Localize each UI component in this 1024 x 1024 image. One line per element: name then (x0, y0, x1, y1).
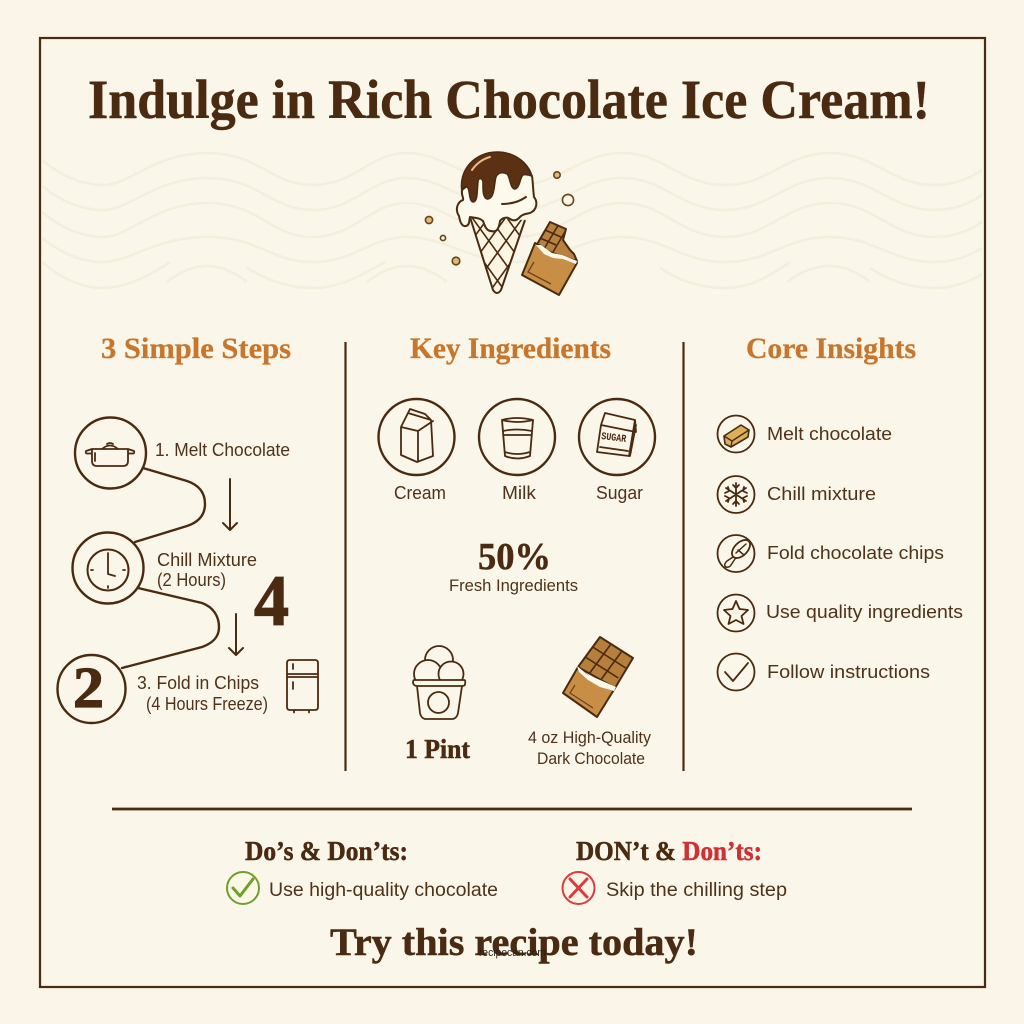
do text: Use high-quality chocolate (269, 879, 498, 901)
icon: dark chocolate bar (563, 637, 633, 717)
insight: follow instructions (718, 654, 930, 690)
stat: 50% fresh ingredients: Fresh Ingredients (449, 576, 578, 595)
small chocolate bar (522, 222, 577, 295)
icon: red cross (562, 872, 594, 904)
arrow 2 (229, 614, 243, 655)
call to action: Try this recipe today! (330, 921, 698, 964)
step 1 label: 1. Melt Chocolate (155, 440, 290, 460)
label: 1 Pint: 1 Pint (405, 734, 470, 764)
heading: do's and don'ts: Do’s & Don’ts: (245, 836, 408, 866)
step 3 circle with number 2: 2 (73, 655, 104, 720)
step 3 label: (4 Hours Freeze) (146, 694, 268, 714)
ingredient: sugar: SUGAR (601, 431, 627, 446)
insight: chill mixture (718, 476, 876, 513)
ingredient: milk (479, 399, 555, 503)
insight: fold chocolate chips (718, 535, 944, 572)
heading: don't and don'ts: DON’t & Don’ts: (576, 836, 762, 866)
icon: green check (227, 872, 259, 904)
big number 4: 4 (254, 561, 289, 641)
icon: ice cream cone with chocolate bar (425, 152, 577, 298)
insight: fold chocolate chips: Fold chocolate chips (767, 543, 944, 563)
stat: 50% fresh ingredients (449, 536, 578, 595)
panel: steps (58, 418, 318, 723)
watermark: recipecan.com (479, 947, 546, 959)
step 2 label: Chill Mixture (157, 550, 257, 570)
don't text: Skip the chilling step (606, 879, 787, 901)
step 3 label: 3. Fold in Chips (137, 673, 259, 693)
label: 4 oz high-quality dark chocolate (528, 729, 652, 768)
ingredient: sugar (579, 399, 655, 503)
label: 4 oz high-quality dark chocolate: 4 oz High-Quality (528, 729, 652, 747)
step 2 label (157, 550, 257, 590)
insight: use quality ingredients (718, 594, 963, 632)
label: Sugar: Sugar (596, 483, 643, 503)
heading: 3 Simple Steps: 3 Simple Steps (101, 332, 291, 365)
label: Cream: Cream (394, 483, 446, 503)
heading: Key Ingredients: Key Ingredients (410, 332, 611, 365)
step 2 circle with clock icon (72, 532, 144, 604)
panel: core insights (718, 416, 963, 690)
label: 4 oz high-quality dark chocolate: Dark Chocolate (537, 750, 645, 768)
step 3 circle with number 2 (58, 655, 126, 723)
insight: melt chocolate (718, 416, 892, 452)
cone (470, 218, 526, 294)
step connector 2 (122, 588, 219, 668)
step 3 label (137, 673, 268, 714)
ingredient: cream (378, 399, 454, 503)
step connector 1 (135, 468, 205, 542)
chocolate drizzle (461, 152, 532, 202)
chocolate sprinkles (425, 172, 574, 265)
title: Indulge in Rich Chocolate Ice Cream! (88, 69, 930, 130)
insight: chill mixture: Chill mixture (767, 484, 876, 504)
icon: pint tub (413, 646, 465, 719)
scoop (457, 160, 536, 231)
panel: key ingredients (378, 399, 655, 768)
stat: 50% fresh ingredients: 50% (478, 536, 551, 578)
label: Milk: Milk (502, 483, 537, 503)
step 2 label: (2 Hours) (157, 570, 226, 590)
insight: use quality ingredients: Use quality ingredients (766, 602, 963, 622)
heading: Core Insights: Core Insights (746, 332, 916, 365)
step 1 circle with pot icon (75, 418, 146, 488)
insight: melt chocolate: Melt chocolate (767, 424, 892, 444)
arrow 1 (223, 479, 237, 530)
insight: follow instructions: Follow instructions (767, 662, 930, 682)
icon: fridge (287, 660, 318, 712)
